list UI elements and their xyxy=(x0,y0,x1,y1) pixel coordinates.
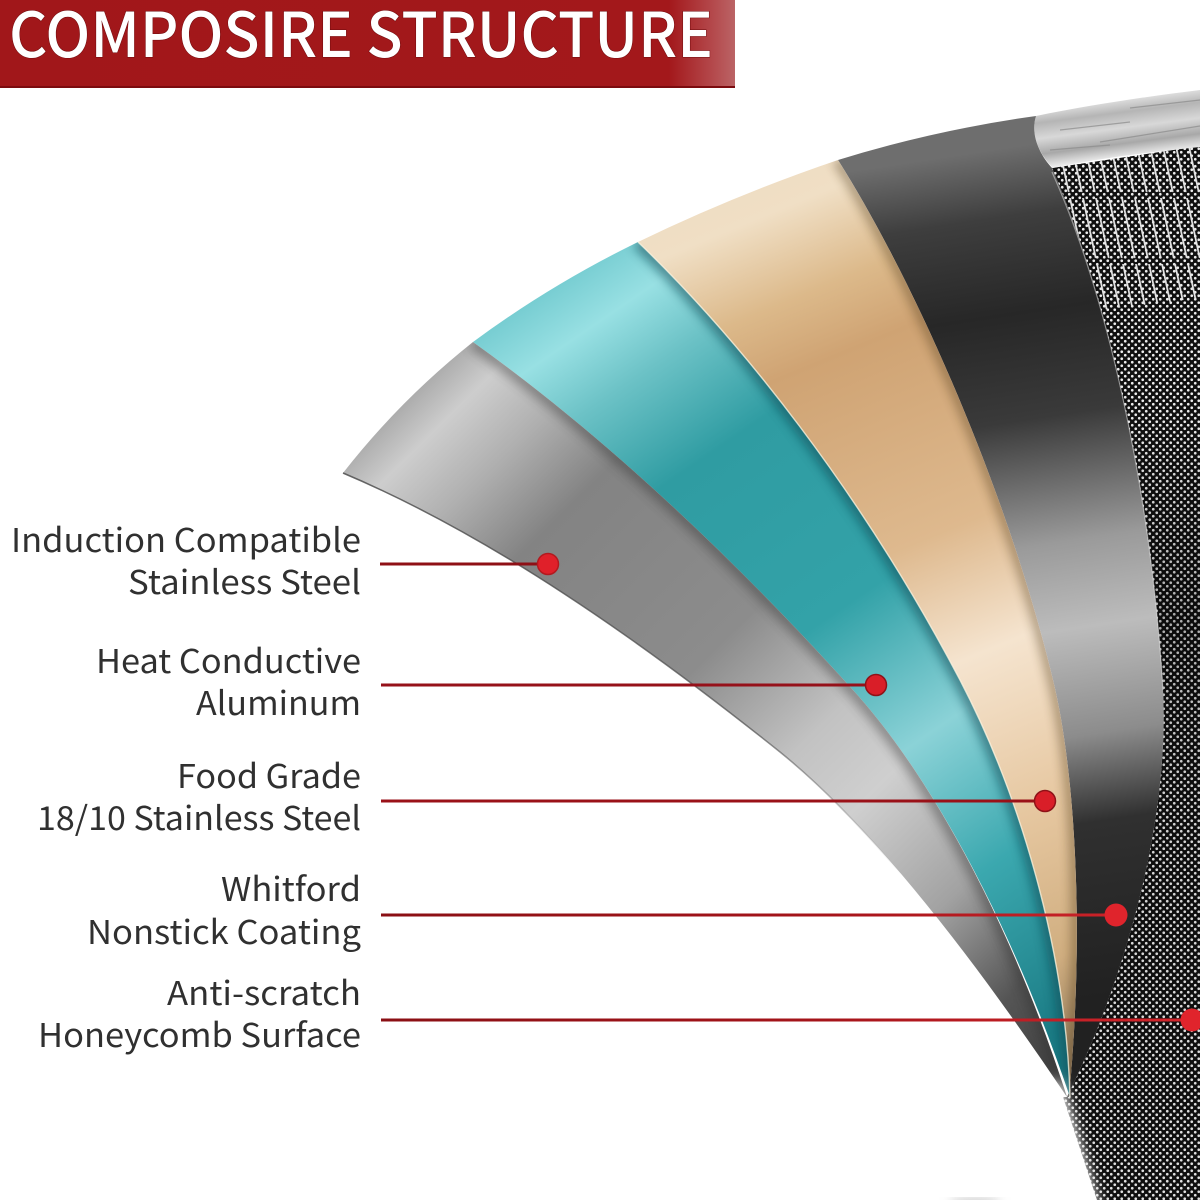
label: whitford nonstick coating: Nonstick Coating xyxy=(87,906,361,954)
callout: aluminum xyxy=(381,674,886,696)
callout: induction stainless steel xyxy=(380,554,558,574)
label: anti-scratch honeycomb surface xyxy=(38,967,361,1057)
nonstick coating layer xyxy=(838,116,1164,1097)
callout: food grade steel xyxy=(381,790,1056,812)
label: heat conductive aluminum: Aluminum xyxy=(196,677,361,725)
label: anti-scratch honeycomb surface: Honeycomb Surface xyxy=(38,1009,361,1057)
label: food grade stainless steel: 18/10 Stainless Steel xyxy=(37,792,361,840)
label: anti-scratch honeycomb surface: Anti-scratch xyxy=(167,967,361,1015)
label: heat conductive aluminum xyxy=(96,635,361,725)
callout: honeycomb surface xyxy=(381,1008,1200,1032)
label: whitford nonstick coating: Whitford xyxy=(221,863,361,911)
label: induction compatible stainless steel xyxy=(11,514,361,604)
faint pan base shading xyxy=(949,1199,1001,1200)
aluminum layer xyxy=(473,242,1070,1097)
label: heat conductive aluminum: Heat Conductive xyxy=(96,635,361,683)
label: food grade stainless steel: Food Grade xyxy=(177,750,361,798)
honeycomb surface layer xyxy=(1040,130,1200,1200)
label: whitford nonstick coating xyxy=(87,863,361,954)
food grade stainless steel layer xyxy=(638,160,1077,1097)
label: food grade stainless steel xyxy=(37,750,361,840)
title banner xyxy=(0,0,735,88)
induction stainless steel layer xyxy=(343,342,1067,1097)
label: induction compatible stainless steel: Induction Compatible xyxy=(11,514,361,562)
white fade at pan base xyxy=(1050,1085,1088,1200)
callout: nonstick coating xyxy=(381,904,1128,926)
label: induction compatible stainless steel: Stainless Steel xyxy=(128,556,361,604)
pan rim xyxy=(1034,90,1200,168)
